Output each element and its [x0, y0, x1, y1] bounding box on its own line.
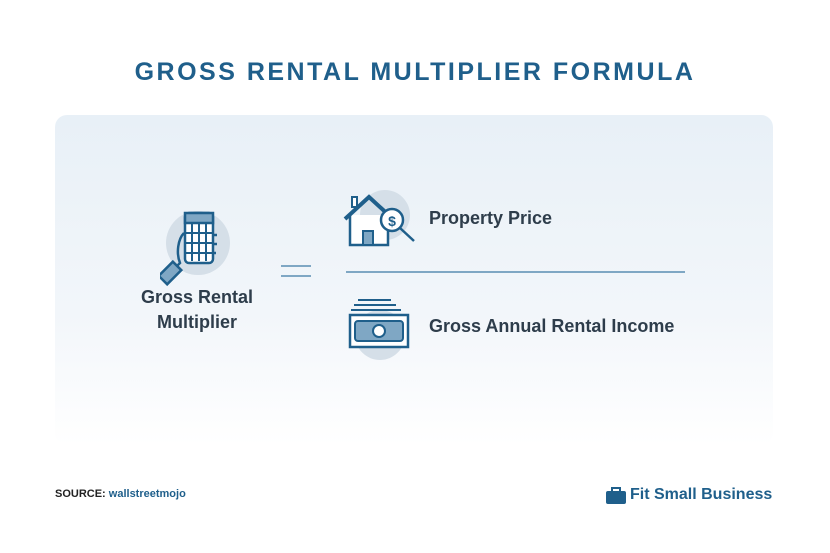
icon: house with dollar magnifier	[344, 190, 415, 246]
label: gross rental multiplier: Gross Rental	[141, 287, 253, 307]
panel: formula	[55, 115, 773, 445]
equals sign	[281, 265, 311, 277]
icon: cash stack	[348, 299, 410, 360]
fraction line	[346, 271, 685, 273]
label: gross rental multiplier: Multiplier	[157, 312, 237, 332]
title: GROSS RENTAL MULTIPLIER FORMULA	[135, 58, 695, 86]
label: property price: Property Price	[429, 208, 552, 228]
icon: house with dollar magnifier: $	[388, 213, 396, 229]
icon: hand with calculator	[160, 211, 230, 286]
label: gross rental multiplier	[141, 287, 253, 332]
icon: briefcase	[606, 487, 626, 504]
source: SOURCE: wallstreetmojo	[55, 488, 186, 500]
label: gross annual rental income: Gross Annual Rental Income	[429, 316, 674, 336]
logo: fit small business: Fit Small Business	[630, 486, 772, 503]
